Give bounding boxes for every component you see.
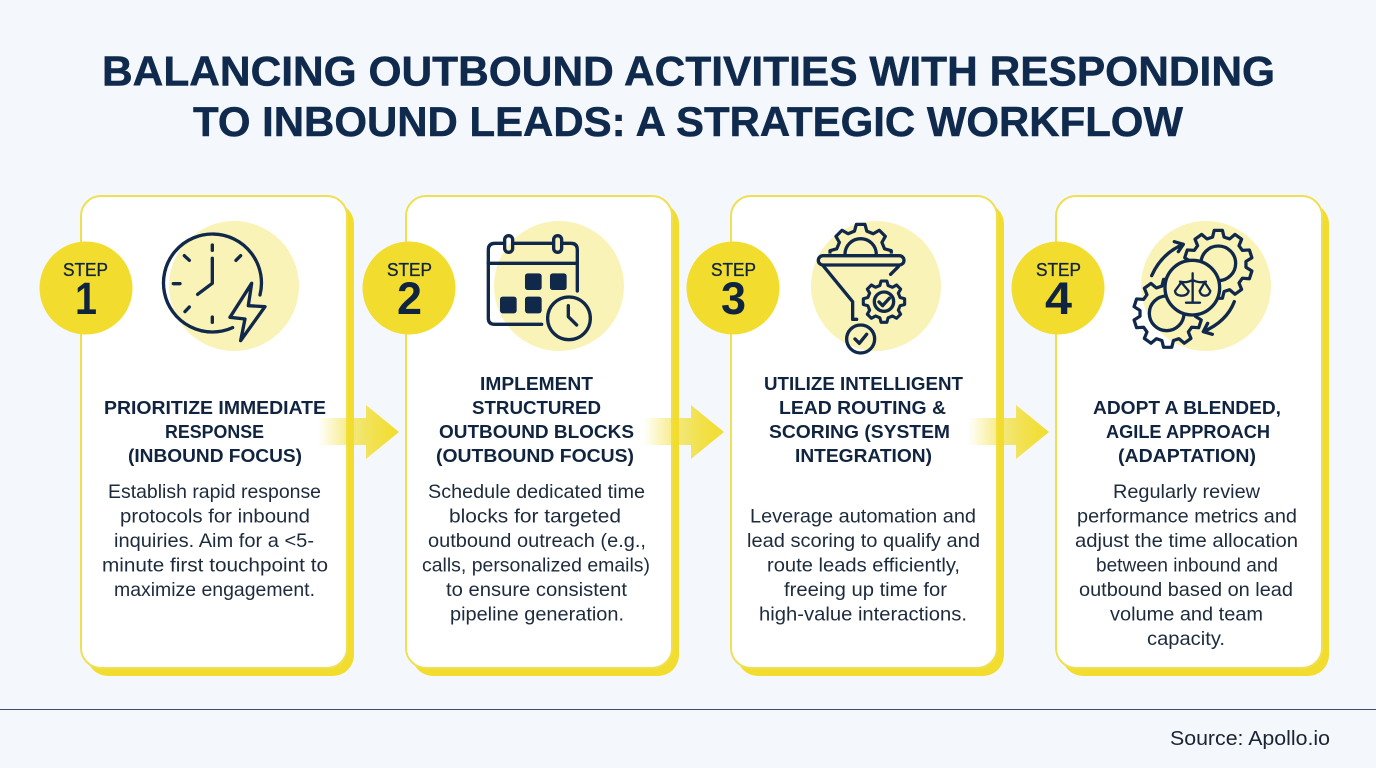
step 3 description: freeing up time for	[784, 579, 948, 601]
step 1 description: maximize engagement.	[114, 579, 315, 601]
source credit: Source: Apollo.io	[1170, 728, 1330, 750]
step 3 heading	[764, 373, 964, 466]
step 1 heading	[104, 397, 326, 466]
step 3 badge: 3	[721, 273, 746, 324]
step 4 heading: ADOPT A BLENDED,	[1093, 397, 1281, 418]
card 1 body	[81, 196, 347, 668]
step 3 badge: STEP	[711, 260, 756, 280]
arrow: step 3 to step 4	[968, 405, 1049, 459]
step 4 description: between inbound and	[1096, 554, 1278, 576]
card 3 body	[731, 196, 997, 668]
step 3 heading: SCORING (SYSTEM	[769, 421, 950, 442]
step 1 badge: 1	[75, 273, 97, 324]
step 1 badge: STEP	[63, 260, 108, 280]
step 4 description: adjust the time allocation	[1075, 530, 1298, 552]
panel: step 3	[686, 196, 1004, 676]
step 3 badge	[686, 242, 780, 334]
step 1 badge	[40, 242, 132, 334]
panel: step 1	[40, 196, 354, 676]
card 4 shadow	[1062, 203, 1329, 676]
step 2 description: calls, personalized emails)	[422, 554, 650, 576]
step 4 description: performance metrics and	[1077, 506, 1297, 528]
step 2 heading	[436, 373, 634, 466]
step 1 heading: RESPONSE	[165, 421, 264, 442]
step 2 description: pipeline generation.	[450, 604, 624, 626]
panel: step 2	[362, 196, 679, 676]
step 4 heading: AGILE APPROACH	[1106, 421, 1270, 442]
card 1 shadow	[87, 203, 354, 676]
step 3 description: route leads efficiently,	[767, 554, 960, 576]
step 3 heading: INTEGRATION)	[795, 445, 932, 466]
step 4 description: Regularly review	[1113, 481, 1261, 503]
step 4 badge: 4	[1045, 273, 1072, 324]
icon: clock with lightning bolt	[163, 234, 265, 341]
step 4 heading	[1093, 397, 1281, 466]
title: BALANCING OUTBOUND ACTIVITIES WITH RESPONDING	[102, 48, 1275, 94]
step 2 heading: STRUCTURED	[472, 397, 601, 418]
step 4 description: capacity.	[1147, 628, 1225, 650]
step 4 description	[1075, 481, 1298, 650]
step 1 heading: PRIORITIZE IMMEDIATE	[104, 397, 326, 418]
card 2 body	[406, 196, 672, 668]
step 1 description: Establish rapid response	[108, 481, 321, 503]
step 3 heading: UTILIZE INTELLIGENT	[764, 373, 964, 394]
step 2 badge	[362, 242, 456, 334]
icon: gears with balance scale	[1134, 230, 1252, 347]
step 4 heading: (ADAPTATION)	[1118, 445, 1256, 466]
step 3 description: Leverage automation and	[750, 506, 976, 528]
step 2 heading: (OUTBOUND FOCUS)	[436, 445, 634, 466]
step 4 description: volume and team	[1110, 604, 1263, 626]
step 2 description: Schedule dedicated time	[428, 481, 645, 503]
step 1 description: protocols for inbound	[120, 506, 310, 528]
step 4 badge	[1012, 242, 1104, 334]
title	[102, 48, 1275, 145]
step 3 description	[747, 506, 980, 626]
icon 4 backdrop	[1141, 221, 1271, 351]
step 3 heading: LEAD ROUTING &	[779, 397, 946, 418]
card 2 shadow	[412, 203, 679, 676]
step 1 description: inquiries. Aim for a <5-	[114, 530, 314, 552]
panel: step 4	[1012, 196, 1329, 676]
step 4 badge: STEP	[1036, 260, 1081, 280]
step 2 description: blocks for targeted	[449, 506, 621, 528]
step 2 badge: STEP	[387, 260, 432, 280]
step 1 description: minute first touchpoint to	[102, 554, 328, 576]
step 2 description	[422, 481, 650, 626]
step 2 heading: OUTBOUND BLOCKS	[439, 421, 634, 442]
card 3 shadow	[737, 203, 1004, 676]
icon: calendar with clock	[488, 236, 590, 340]
step 2 heading: IMPLEMENT	[480, 373, 594, 394]
step 1 heading: (INBOUND FOCUS)	[128, 445, 302, 466]
icon 3 backdrop	[811, 221, 941, 351]
step 1 description	[102, 481, 328, 601]
step 4 description: outbound based on lead	[1079, 579, 1293, 601]
arrow: step 2 to step 3	[643, 405, 724, 459]
icon 1 backdrop	[169, 221, 299, 351]
icon: funnel with gears and check	[818, 224, 905, 353]
icon 2 backdrop	[494, 221, 624, 351]
card 4 body	[1056, 196, 1322, 668]
step 2 badge: 2	[397, 273, 422, 324]
arrow: step 1 to step 2	[318, 405, 399, 459]
step 2 description: outbound outreach (e.g.,	[428, 530, 646, 552]
step 3 description: high-value interactions.	[759, 604, 967, 626]
step 3 description: lead scoring to qualify and	[747, 530, 980, 552]
step 2 description: to ensure consistent	[446, 579, 628, 601]
title: TO INBOUND LEADS: A STRATEGIC WORKFLOW	[193, 98, 1183, 145]
